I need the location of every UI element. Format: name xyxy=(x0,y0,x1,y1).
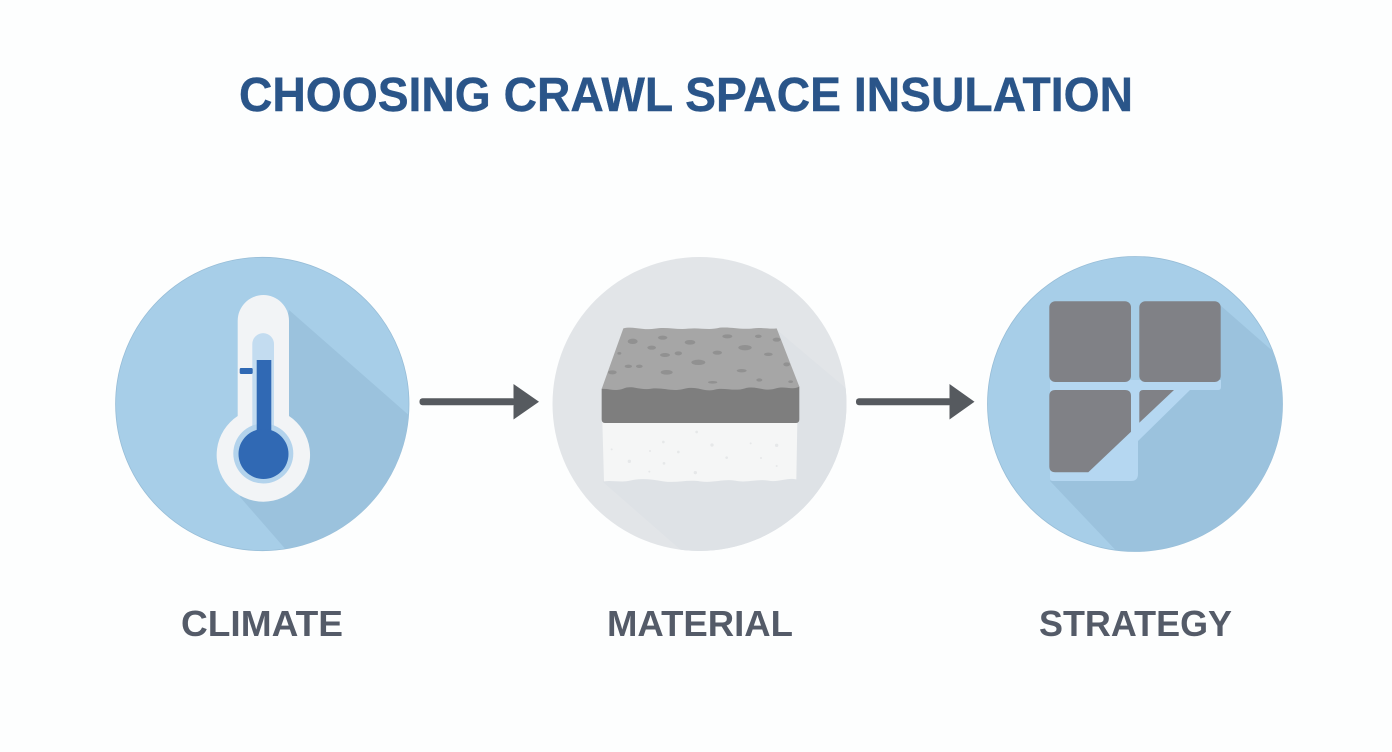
circle background: climate xyxy=(116,257,409,551)
label: strategy: STRATEGY xyxy=(1039,603,1232,644)
dark side of block xyxy=(602,382,799,423)
title: CHOOSING CRAWL SPACE INSULATION xyxy=(239,69,1133,122)
light insulation strip xyxy=(1050,380,1221,481)
white foam layer xyxy=(602,422,797,482)
thermometer glass channel xyxy=(252,333,274,430)
thermometer body xyxy=(217,295,310,502)
panel: top left xyxy=(1049,301,1131,382)
mercury bulb xyxy=(238,429,288,479)
circle background: strategy xyxy=(988,256,1282,552)
scale tick xyxy=(240,368,253,374)
arrow: material to strategy xyxy=(856,384,974,420)
label: material: MATERIAL xyxy=(607,603,793,644)
long shadow: thermometer xyxy=(240,310,408,548)
mercury column xyxy=(257,360,271,440)
long shadow: insulation block xyxy=(681,389,846,551)
panel: top right xyxy=(1139,301,1221,382)
top face pores xyxy=(608,334,793,384)
top face of block xyxy=(602,327,799,390)
foam specks xyxy=(611,431,778,474)
circle background: material xyxy=(552,257,846,551)
panel: strategy icon xyxy=(988,256,1300,560)
bulb ring xyxy=(233,424,293,484)
panel: bottom left xyxy=(1049,390,1131,472)
icon: insulation block xyxy=(602,327,799,482)
label: climate: CLIMATE xyxy=(181,603,343,644)
arrow: climate to material xyxy=(420,384,539,420)
icon: thermometer xyxy=(217,295,310,502)
panel: material icon xyxy=(552,257,860,560)
icon: insulation panels xyxy=(1049,301,1221,481)
long shadow: panels xyxy=(1050,306,1282,551)
panel: climate icon xyxy=(116,257,420,560)
panel: bottom right xyxy=(1139,390,1174,423)
